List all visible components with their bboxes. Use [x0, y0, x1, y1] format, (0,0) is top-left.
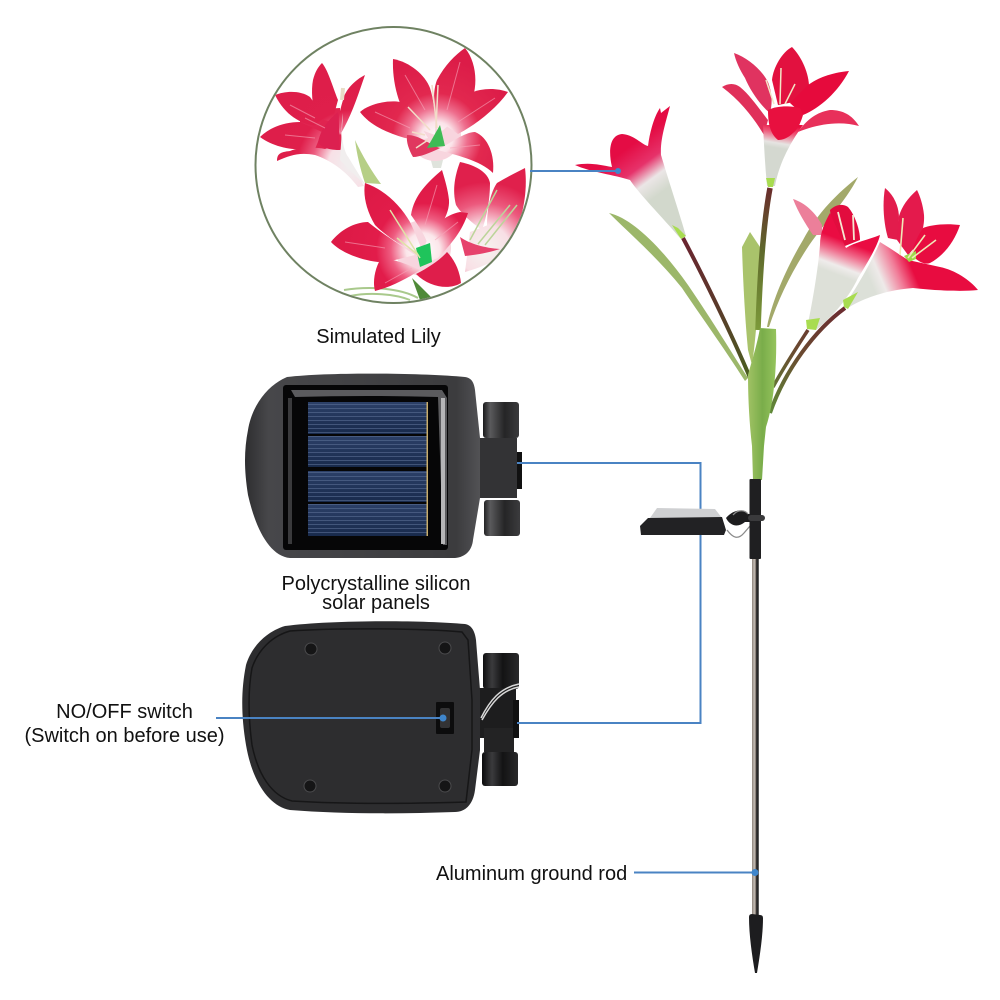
rear body [242, 621, 480, 813]
inset ring [256, 27, 532, 303]
switch [436, 702, 454, 734]
caption: Simulated Lily: Simulated Lily [316, 326, 441, 348]
flower: left [575, 106, 686, 239]
screws [304, 642, 451, 792]
rear inner edge [249, 629, 472, 803]
flower: right front [843, 188, 978, 309]
panel body [245, 374, 480, 558]
inset flower: upper centre [360, 48, 508, 173]
caption: on/off switch: (Switch on before use) [24, 725, 225, 747]
caption: solar panels: Polycrystalline silicon [282, 573, 470, 595]
caption: solar panels [282, 573, 470, 614]
inset flower: right [454, 162, 526, 272]
connector: rod [634, 872, 755, 874]
leaves [609, 177, 858, 381]
caption: on/off switch: NO/OFF switch [56, 701, 193, 723]
hinge top [477, 402, 522, 536]
connector: flower [530, 170, 618, 172]
solar panel back view [242, 621, 519, 813]
rear hinge [478, 653, 519, 786]
ground rod [748, 479, 765, 973]
caption: on/off switch [24, 701, 225, 747]
stems [683, 188, 845, 413]
inset flower: lower centre [331, 170, 468, 291]
callout dot: rod [752, 869, 758, 876]
sheath [748, 328, 776, 480]
white wire [481, 684, 519, 720]
connector lines [216, 463, 700, 723]
lily plant [575, 47, 978, 973]
circular inset: lily close-up [256, 27, 532, 303]
inset leaf and stems [344, 140, 432, 300]
callout dot: flower [615, 168, 621, 174]
inset flower: upper left [260, 63, 366, 187]
mini solar panel on rod [640, 508, 752, 537]
switch pointer dot [440, 714, 446, 722]
panel window [283, 385, 448, 550]
solar cells [308, 402, 428, 536]
flower: top [722, 47, 859, 187]
caption: ground rod: Aluminum ground rod [436, 863, 627, 885]
caption: solar panels: solar panels [322, 592, 430, 614]
flower: right rear [793, 199, 880, 330]
solar panel front view [245, 374, 522, 558]
